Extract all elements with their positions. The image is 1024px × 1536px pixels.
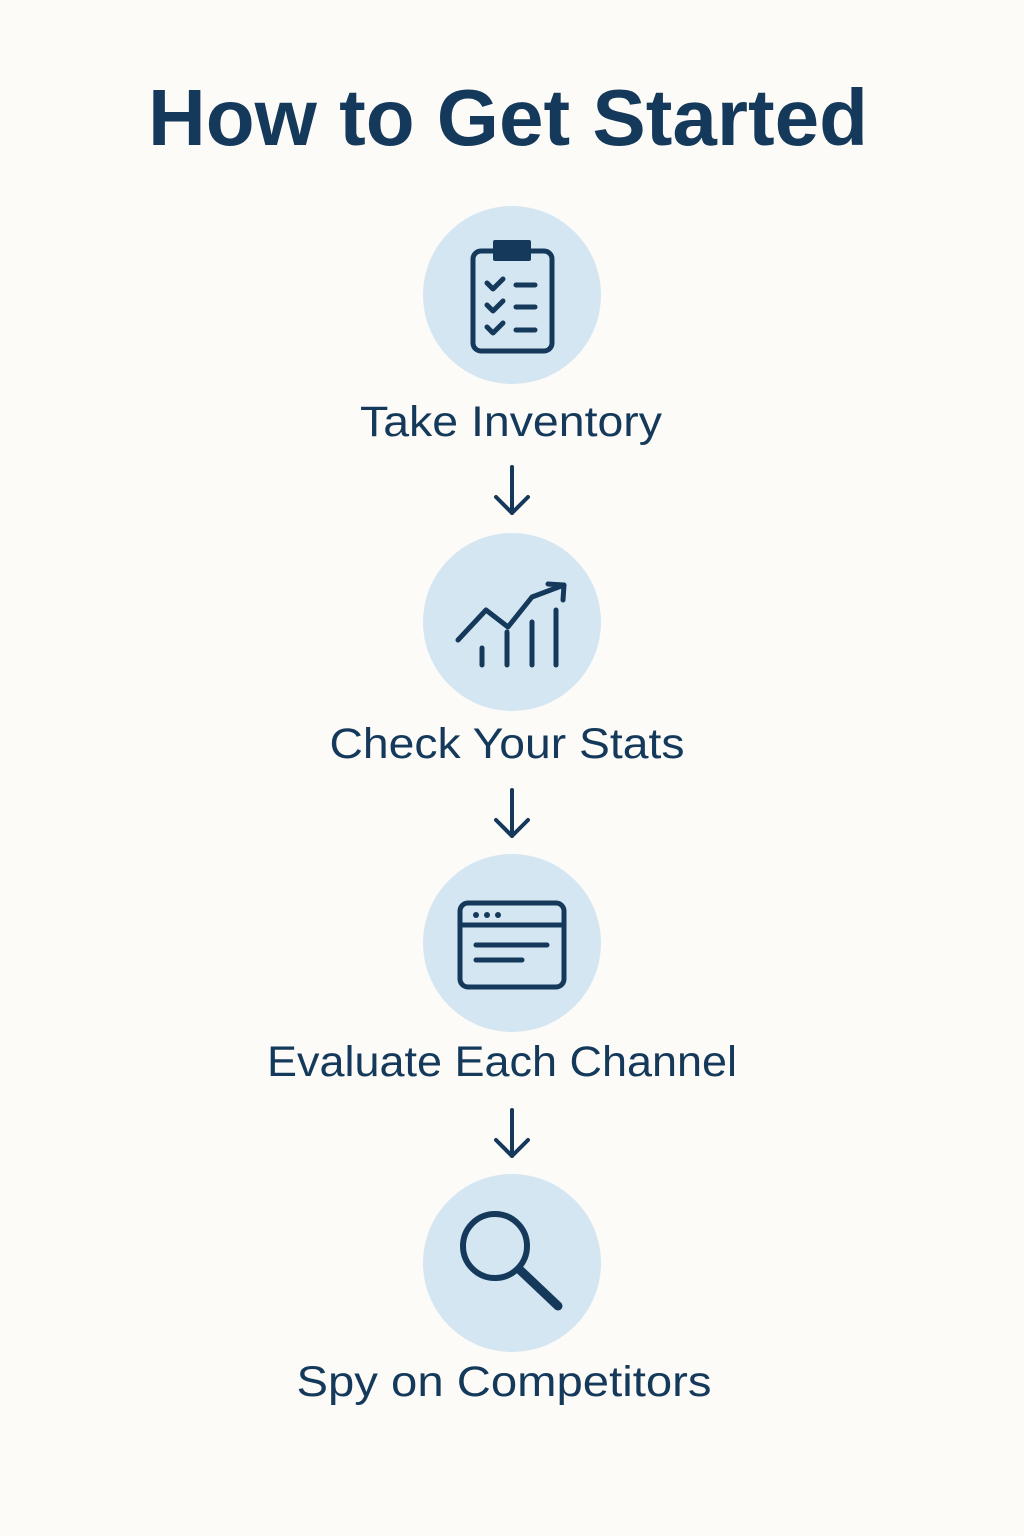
step 2: check your stats xyxy=(330,533,684,768)
label: evaluate each channel: Evaluate Each Channel xyxy=(267,1038,737,1086)
arrow 2 xyxy=(496,790,528,836)
icon: chart xyxy=(423,533,601,711)
step 3: evaluate each channel xyxy=(267,854,737,1086)
step 1: take inventory xyxy=(360,206,663,446)
label: spy on competitors: Spy on Competitors xyxy=(296,1358,712,1406)
arrow 3 xyxy=(496,1110,528,1156)
icon: clipboard xyxy=(423,206,601,384)
title: How to Get Started xyxy=(148,73,868,162)
arrow 1 xyxy=(496,467,528,513)
icon: browser window xyxy=(423,854,601,1032)
icon: magnifier xyxy=(423,1174,601,1352)
label: check your stats: Check Your Stats xyxy=(330,720,684,768)
step 4: spy on competitors xyxy=(296,1174,712,1406)
label: take inventory: Take Inventory xyxy=(360,398,663,446)
